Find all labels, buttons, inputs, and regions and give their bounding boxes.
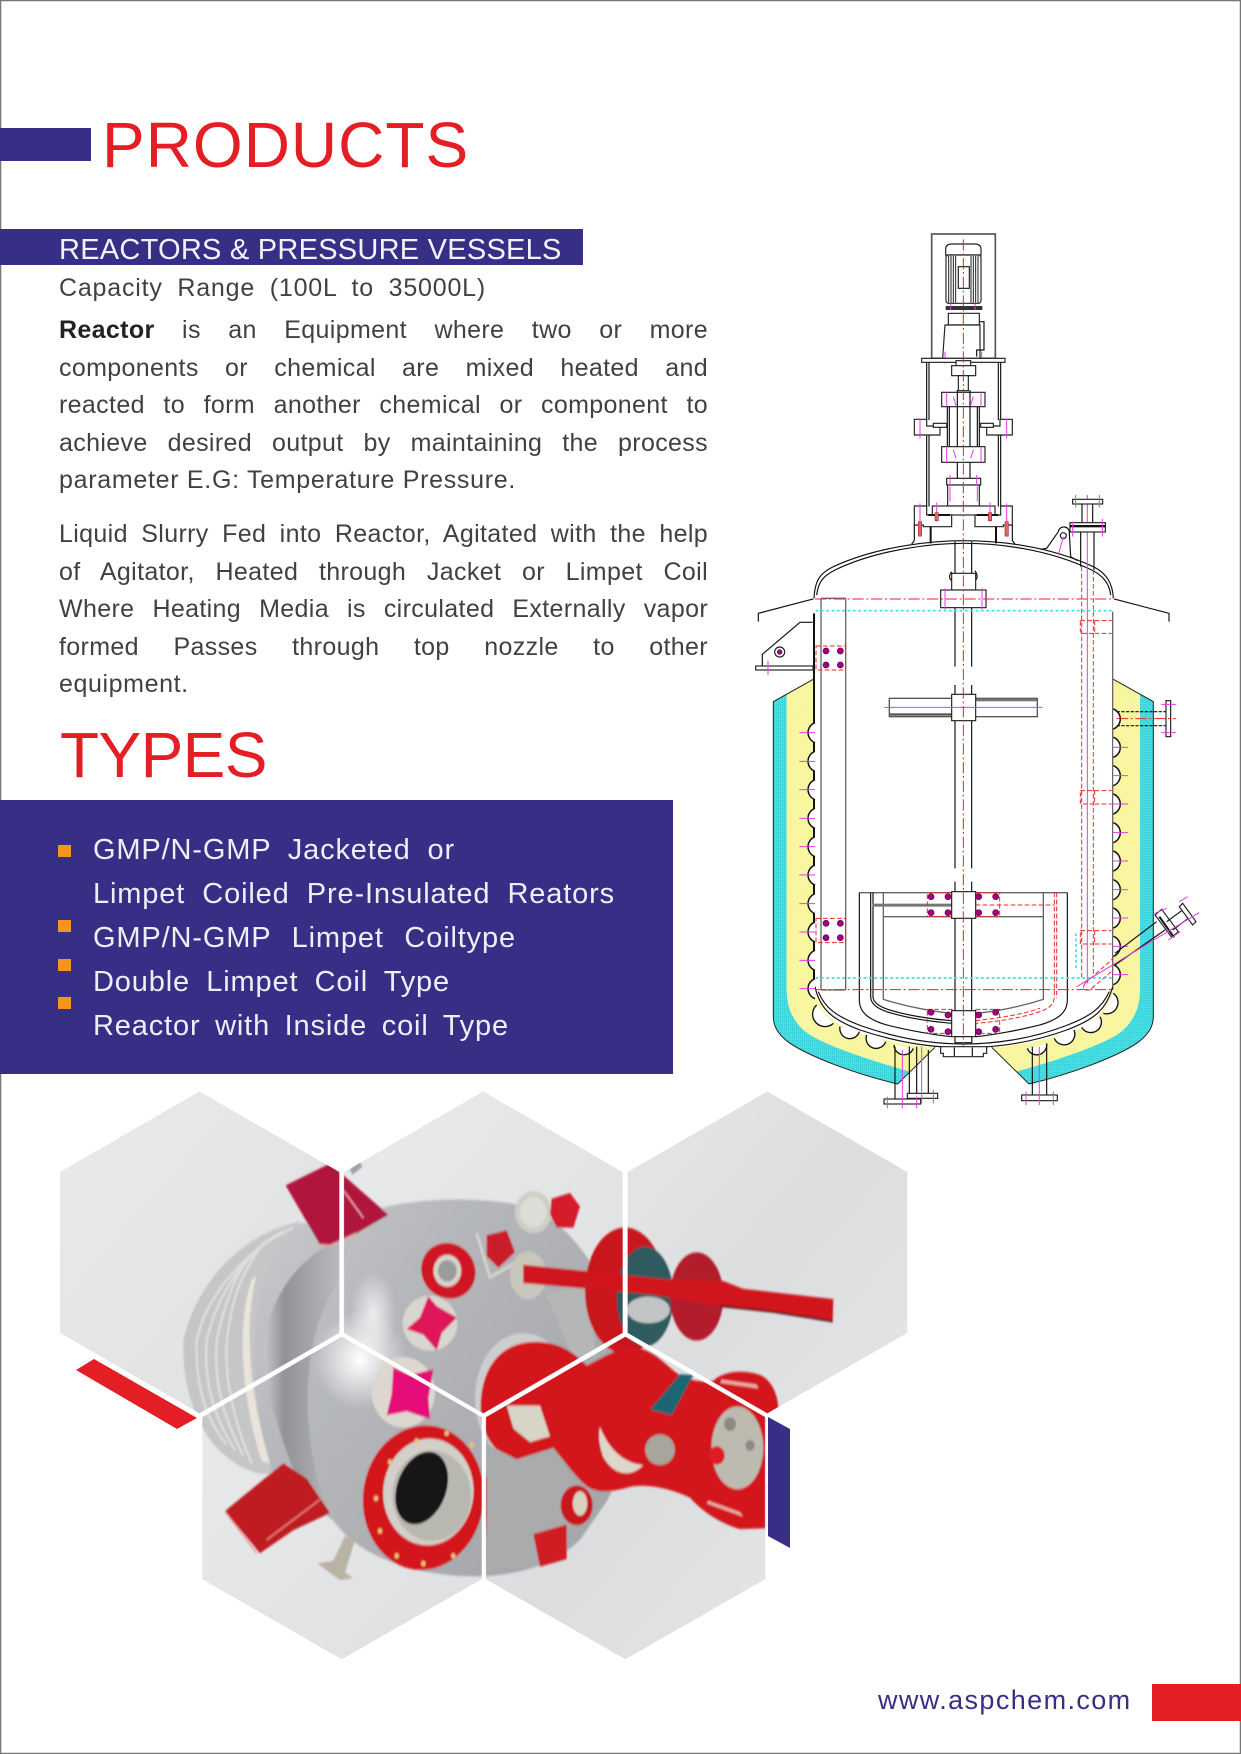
list item 1: GMP/N-GMP Jacketed or (93, 834, 455, 866)
lower bracket (225, 1463, 330, 1553)
baffle left (816, 598, 846, 990)
vessel body (183, 1199, 627, 1576)
hatch stem (317, 1536, 355, 1580)
silver lower vessel patch (487, 1444, 593, 1572)
red pump assembly (481, 1342, 778, 1529)
drive frame and motor (922, 234, 1005, 363)
small top fittings (487, 1230, 515, 1268)
footer red block (1152, 1684, 1241, 1721)
photo hexagon panel (60, 1091, 907, 1659)
text block: process description: Where Heating Media is circulated Externally vapor (59, 595, 708, 623)
top bracket (286, 1164, 388, 1246)
side nozzles (1077, 701, 1199, 987)
text block: reactor description (59, 316, 708, 494)
pink flange cover large (372, 1357, 435, 1428)
pink flange cover small (403, 1296, 457, 1351)
list: reactor types (58, 834, 615, 1042)
diagram: reactor cross-section (756, 234, 1199, 1108)
text block: reactor description: reacted to form another chemical or component to (59, 391, 708, 419)
highlight (319, 1316, 401, 1404)
bullet 3 (58, 959, 71, 971)
text block: reactor description: components or chemical are mixed heated and (59, 354, 708, 382)
level lines (815, 239, 1113, 1057)
text: capacity range: Capacity Range (100L to 35000L) (59, 274, 486, 302)
small flange (420, 1242, 476, 1300)
bullet 1 (58, 845, 71, 857)
hexagon backgrounds (60, 1091, 907, 1659)
limpet coils (799, 709, 1128, 1055)
text block: process description: formed Passes through top nozzle to other (59, 633, 708, 661)
text block: reactor description: Reactor is an Equipment where two or more (59, 316, 708, 344)
panel: types (0, 800, 673, 1074)
text block: process description: of Agitator, Heated through Jacket or Limpet Coil (59, 558, 708, 586)
bottom manway flange (362, 1424, 482, 1572)
heading accent bar (0, 128, 91, 161)
silver collar (557, 1289, 596, 1358)
limpet coil dome (203, 1222, 299, 1474)
agitator bearing stand (912, 361, 1015, 544)
insulation jacket left (773, 678, 935, 1084)
pump details (507, 1406, 550, 1442)
list item 3: Double Limpet Coil Type (93, 966, 450, 998)
bullet 4 (58, 997, 71, 1009)
text block: reactor description: parameter E.G: Temperature Pressure. (59, 466, 516, 494)
title: products: PRODUCTS (102, 109, 469, 181)
text block: process description: Liquid Slurry Fed into Reactor, Agitated with the help (59, 520, 708, 548)
impeller (884, 694, 1043, 721)
heading: reactors and pressure vessels: REACTORS & PRESSURE VESSELS (59, 234, 562, 266)
text block: process description (59, 520, 708, 698)
bottom nozzles (884, 1043, 1057, 1108)
top brackets and lug (756, 527, 1169, 675)
navy accent parallelogram (768, 1417, 790, 1548)
bullet 2 (58, 920, 71, 932)
long red arm (523, 1265, 833, 1321)
top-right flange (585, 1228, 665, 1354)
nozzle surround ring (474, 1332, 548, 1448)
photo: reactor vessel (183, 1162, 833, 1591)
vessel shell (814, 541, 1113, 1048)
insulation jacket right (992, 678, 1153, 1084)
footer website: www.aspchem.com (878, 1685, 1132, 1715)
list item 2: GMP/N-GMP Limpet Coiltype (93, 922, 516, 954)
heading: types: TYPES (60, 719, 267, 791)
red accent parallelogram (76, 1359, 197, 1429)
sub-heading band (0, 229, 583, 265)
dip pipe and baffle right (1070, 495, 1113, 990)
text block: reactor description: achieve desired output by maintaining the process (59, 429, 708, 457)
list item 4: Reactor with Inside coil Type (93, 1010, 509, 1042)
list item 1 continued: Limpet Coiled Pre-Insulated Reators (93, 878, 615, 910)
anchor agitator (859, 892, 1067, 1043)
text block: process description: equipment. (59, 670, 189, 698)
agitator shaft (941, 542, 986, 1043)
